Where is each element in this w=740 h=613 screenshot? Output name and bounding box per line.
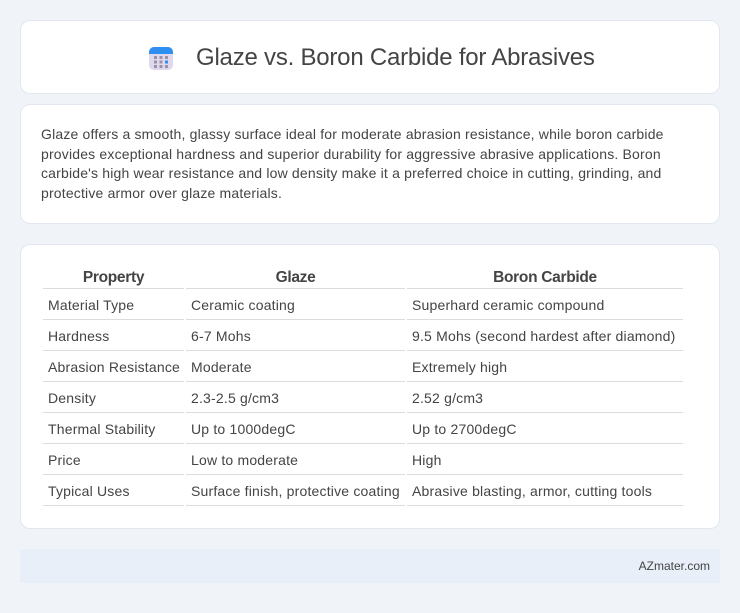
- row: typical uses: [48, 483, 652, 499]
- table header: Boron Carbide: [493, 269, 597, 286]
- row: abrasion resistance: Moderate: [191, 359, 252, 375]
- row: typical uses: Abrasive blasting, armor, cutting tools: [412, 483, 652, 499]
- panel: title card: [20, 20, 720, 94]
- summary text: provides exceptional hardness and superior durability for aggressive abrasive applications. Boron: [41, 146, 661, 162]
- row: abrasion resistance: [48, 359, 507, 375]
- panel: comparison table card: [20, 244, 720, 529]
- row: hardness: 9.5 Mohs (second hardest after diamond): [412, 328, 675, 344]
- comparison table: [43, 269, 683, 506]
- table header: Property: [83, 269, 144, 286]
- row: density: 2.3-2.5 g/cm3: [191, 390, 279, 406]
- footer source text: AZmater.com: [639, 559, 710, 573]
- row: thermal stability: Thermal Stability: [48, 421, 156, 437]
- footer bar: [20, 549, 720, 583]
- row: density: [48, 390, 483, 406]
- row: material type: Material Type: [48, 297, 134, 313]
- summary text: [41, 126, 664, 201]
- row: typical uses: Typical Uses: [48, 483, 130, 499]
- summary text: protective armor over glaze materials.: [41, 184, 282, 200]
- table header: [83, 269, 597, 286]
- row: price: High: [412, 452, 442, 468]
- row: price: Low to moderate: [191, 452, 298, 468]
- row: abrasion resistance: Extremely high: [412, 359, 507, 375]
- summary text: Glaze offers a smooth, glassy surface ideal for moderate abrasion resistance, while boron carbide: [41, 126, 664, 142]
- row: hardness: 6-7 Mohs: [191, 328, 251, 344]
- row: typical uses: Surface finish, protective coating: [191, 483, 400, 499]
- row: hardness: Hardness: [48, 328, 109, 344]
- row: material type: [48, 297, 604, 313]
- row: price: Price: [48, 452, 81, 468]
- icon: calendar: [149, 47, 173, 70]
- row: density: 2.52 g/cm3: [412, 390, 483, 406]
- row: hardness: [48, 328, 675, 344]
- panel: summary card: [20, 104, 720, 224]
- row: thermal stability: [48, 421, 517, 437]
- title: Glaze vs. Boron Carbide for Abrasives: [196, 44, 595, 71]
- row: material type: Ceramic coating: [191, 297, 295, 313]
- row: thermal stability: Up to 1000degC: [191, 421, 296, 437]
- row: thermal stability: Up to 2700degC: [412, 421, 517, 437]
- summary text: carbide's high wear resistance and low density make it a preferred choice in cutting, grinding, and: [41, 165, 662, 181]
- row: abrasion resistance: Abrasion Resistance: [48, 359, 180, 375]
- table header: Glaze: [276, 269, 315, 286]
- row: price: [48, 452, 442, 468]
- row: material type: Superhard ceramic compound: [412, 297, 604, 313]
- row: density: Density: [48, 390, 96, 406]
